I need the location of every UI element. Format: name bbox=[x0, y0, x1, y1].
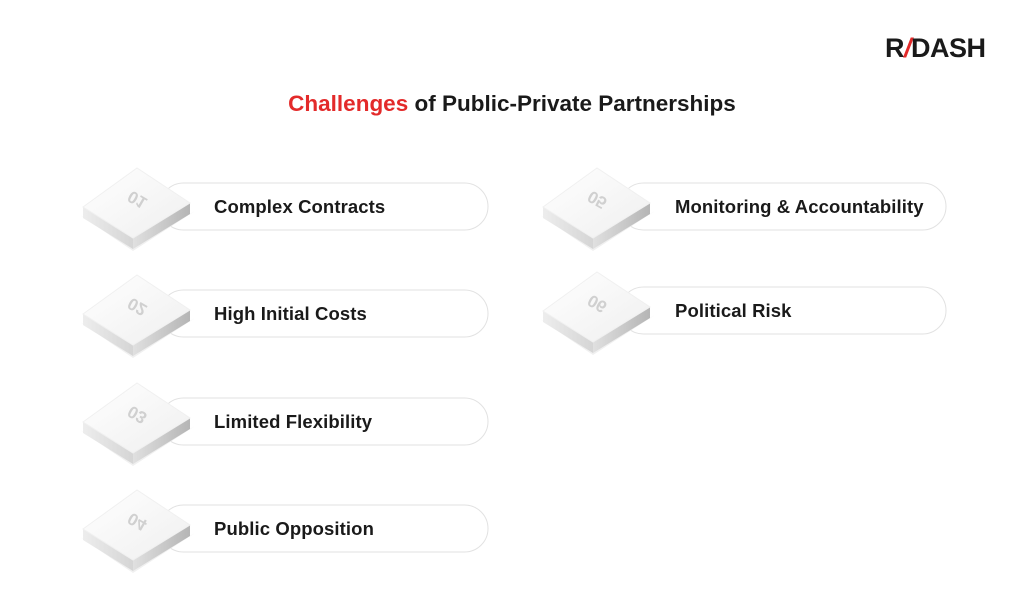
label 6: Political Risk bbox=[675, 300, 792, 321]
item 6 bbox=[540, 272, 946, 355]
label 4: Public Opposition bbox=[214, 518, 374, 539]
item 3: 03 bbox=[124, 402, 150, 428]
title: Challenges of Public-Private Partnerships bbox=[288, 91, 736, 116]
logo: R/DASH bbox=[885, 33, 986, 63]
item 2 bbox=[80, 275, 488, 358]
item 1 bbox=[80, 168, 488, 251]
item 6: 06 bbox=[584, 291, 610, 317]
item 5 bbox=[540, 168, 946, 251]
item 4: 04 bbox=[124, 509, 151, 535]
item 3 bbox=[80, 383, 488, 466]
label 1: Complex Contracts bbox=[214, 196, 385, 217]
item 4 bbox=[80, 490, 488, 573]
label 3: Limited Flexibility bbox=[214, 411, 372, 432]
label 5: Monitoring & Accountability bbox=[675, 196, 924, 217]
item 2: 02 bbox=[124, 294, 150, 320]
item 1: 01 bbox=[124, 187, 150, 213]
label 2: High Initial Costs bbox=[214, 303, 367, 324]
item 5: 05 bbox=[584, 187, 610, 213]
